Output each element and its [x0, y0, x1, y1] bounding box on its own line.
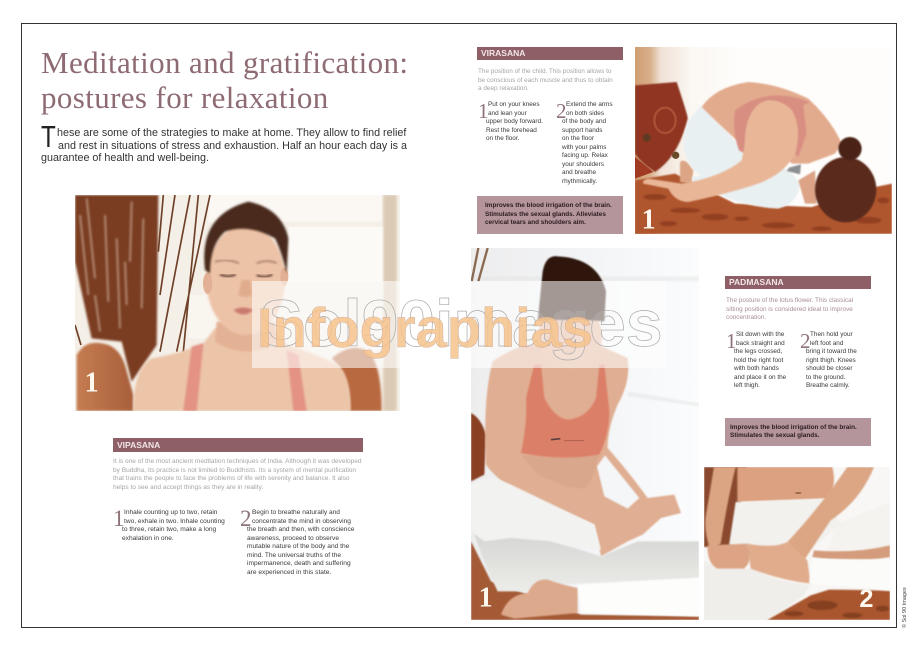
virasana step 1: upper body forward.	[486, 118, 543, 125]
vipasana step 2: concentrate the mind in observing	[252, 518, 351, 524]
photo: legs crossed in lotus position: 2	[859, 585, 873, 613]
padmasana description: The posture of the lotus flower. This classical	[726, 297, 853, 304]
virasana step 2: your shoulders	[562, 160, 604, 168]
virasana step 1: Put on your knees	[488, 101, 540, 108]
watermark outline text: Sol90images	[259, 286, 663, 360]
panel: padmasana	[725, 276, 871, 446]
virasana benefits box: cervical tears and shoulders aim.	[485, 219, 586, 226]
padmasana step 2: to the ground.	[806, 374, 845, 380]
vipasana description: It is one of the most ancient meditation techniques of India. Although it was developed	[113, 458, 362, 465]
virasana description: be conscious of each muscle and thus to obtain	[478, 77, 613, 84]
virasana benefits box: Stimulates the sexual glands. Alleviates	[485, 211, 606, 218]
virasana step 1: 1	[478, 99, 488, 123]
photo: woman meditating, face with closed eyes: 1	[85, 368, 99, 399]
virasana step 2: Extend the arms	[566, 101, 613, 108]
padmasana step 1: with both hands	[734, 365, 779, 372]
heading: virasana	[477, 47, 623, 60]
heading: padmasana: PADMASANA	[729, 277, 784, 287]
virasana step 1: and lean your	[488, 110, 527, 116]
vipasana step 2: mind. The universal truths of the	[247, 552, 341, 558]
vipasana step 2: awareness, proceed to observe	[247, 534, 339, 542]
padmasana benefits box: Improves the blood irrigation of the brain.	[730, 424, 857, 430]
introduction text	[41, 119, 407, 164]
padmasana description: concentration.	[726, 314, 766, 321]
vipasana description: that trains the people to face the problems of life with serenity and balance. It also	[113, 475, 350, 482]
virasana step 2: rhythmically.	[562, 178, 597, 184]
padmasana step 1	[726, 329, 786, 389]
watermark orange text: Infographias	[257, 296, 593, 359]
vipasana step 1: Inhale counting up to two, retain	[124, 509, 217, 516]
padmasana step 1: left thigh.	[734, 382, 760, 389]
vipasana step 2: impermanence, death and suffering	[247, 560, 351, 567]
padmasana step 2: right thigh. Knees	[806, 356, 856, 364]
virasana description: The position of the child. This position allows to	[478, 68, 611, 75]
virasana step 1: Rest the forehead	[486, 126, 537, 134]
padmasana step 2: 2	[800, 329, 810, 353]
virasana step 2: support hands	[562, 126, 603, 134]
padmasana step 1: hold the right foot	[734, 356, 783, 364]
watermark	[252, 281, 667, 368]
padmasana step 2: bring it toward the	[806, 348, 857, 355]
heading: virasana: VIRASANA	[481, 48, 525, 58]
virasana step 2: 2	[556, 99, 566, 123]
vipasana step 2: Begin to breathe naturally and	[252, 509, 340, 516]
copyright credit: © Sol 90 Images	[902, 587, 908, 628]
introduction text: guarantee of health and well-being.	[41, 152, 209, 164]
vipasana step 1	[113, 506, 225, 542]
vipasana step 2: 2	[240, 506, 252, 531]
virasana step 2: on the floor	[562, 135, 594, 142]
padmasana benefits box	[725, 418, 871, 446]
virasana benefits box: Improves the blood irrigation of the brain.	[485, 202, 612, 209]
padmasana step 2: should be closer	[806, 365, 853, 372]
virasana step 2: and breathe	[562, 169, 596, 176]
vipasana description: helps to see and accept things as they are in reality.	[113, 484, 263, 490]
padmasana step 1: Sit down with the	[736, 331, 784, 338]
vipasana step 2: mutable nature of the body and the	[247, 543, 349, 550]
panel: vipasana	[113, 438, 363, 576]
photo: seated woman holding her foot: 1	[479, 582, 493, 613]
photo: legs crossed in lotus position	[704, 467, 890, 620]
virasana step 2: on both sides	[566, 110, 604, 116]
padmasana step 2	[800, 329, 857, 389]
panel: virasana	[477, 47, 623, 234]
introduction text: and rest in situations of stress and exhaustion. Half an hour each day is a	[58, 140, 407, 152]
vipasana description: by Buddha, its practice is not limited to Buddhists. Its a system of mental purification	[113, 466, 356, 474]
padmasana step 1: 1	[726, 329, 736, 353]
vipasana description	[113, 458, 362, 490]
vipasana step 1: to three, retain two, make a long	[122, 526, 216, 533]
title	[41, 45, 408, 115]
padmasana description: sitting position is considered ideal to improve	[726, 306, 853, 313]
virasana step 2: of the body and	[562, 118, 606, 125]
title: Meditation and gratification:	[41, 45, 408, 80]
virasana step 1	[478, 99, 543, 142]
photo: child pose on red cushions	[635, 47, 892, 234]
virasana step 2	[556, 99, 613, 184]
padmasana benefits box: Stimulates the sexual glands.	[730, 432, 820, 439]
vipasana step 2: the breath and then, with conscience	[247, 526, 354, 533]
padmasana step 2: left foot and	[810, 340, 843, 346]
heading: vipasana: VIPASANA	[117, 440, 160, 450]
photo: seated woman holding her foot	[471, 248, 699, 620]
introduction text: T	[41, 119, 56, 154]
virasana description	[478, 68, 613, 92]
vipasana step 2: are experienced in this state.	[247, 568, 331, 576]
vipasana step 2	[240, 506, 354, 576]
photo: woman meditating, face with closed eyes	[75, 195, 400, 411]
padmasana step 2: Then hold your	[810, 331, 853, 338]
virasana step 2: facing up. Relax	[562, 152, 608, 159]
virasana step 2: with your palms	[562, 144, 606, 150]
heading: padmasana	[725, 276, 871, 289]
introduction text: hese are some of the strategies to make at home. They allow to find relief	[57, 127, 406, 139]
heading: vipasana	[113, 438, 363, 452]
vipasana step 1: exhalation in one.	[122, 534, 174, 542]
padmasana description	[726, 297, 853, 321]
padmasana step 1: back straight and	[736, 340, 785, 346]
vipasana step 1: 1	[113, 506, 124, 531]
padmasana step 1: and place it on the	[734, 374, 786, 380]
virasana description: a deep relaxation.	[478, 85, 529, 92]
vipasana step 1: two, exhale in two. Inhale counting	[124, 518, 225, 524]
title: postures for relaxation	[41, 80, 329, 115]
padmasana step 2: Breathe calmly.	[806, 382, 850, 389]
virasana benefits box	[477, 196, 623, 234]
virasana step 1: on the floor.	[486, 135, 519, 142]
padmasana step 1: the legs crossed,	[734, 348, 782, 355]
